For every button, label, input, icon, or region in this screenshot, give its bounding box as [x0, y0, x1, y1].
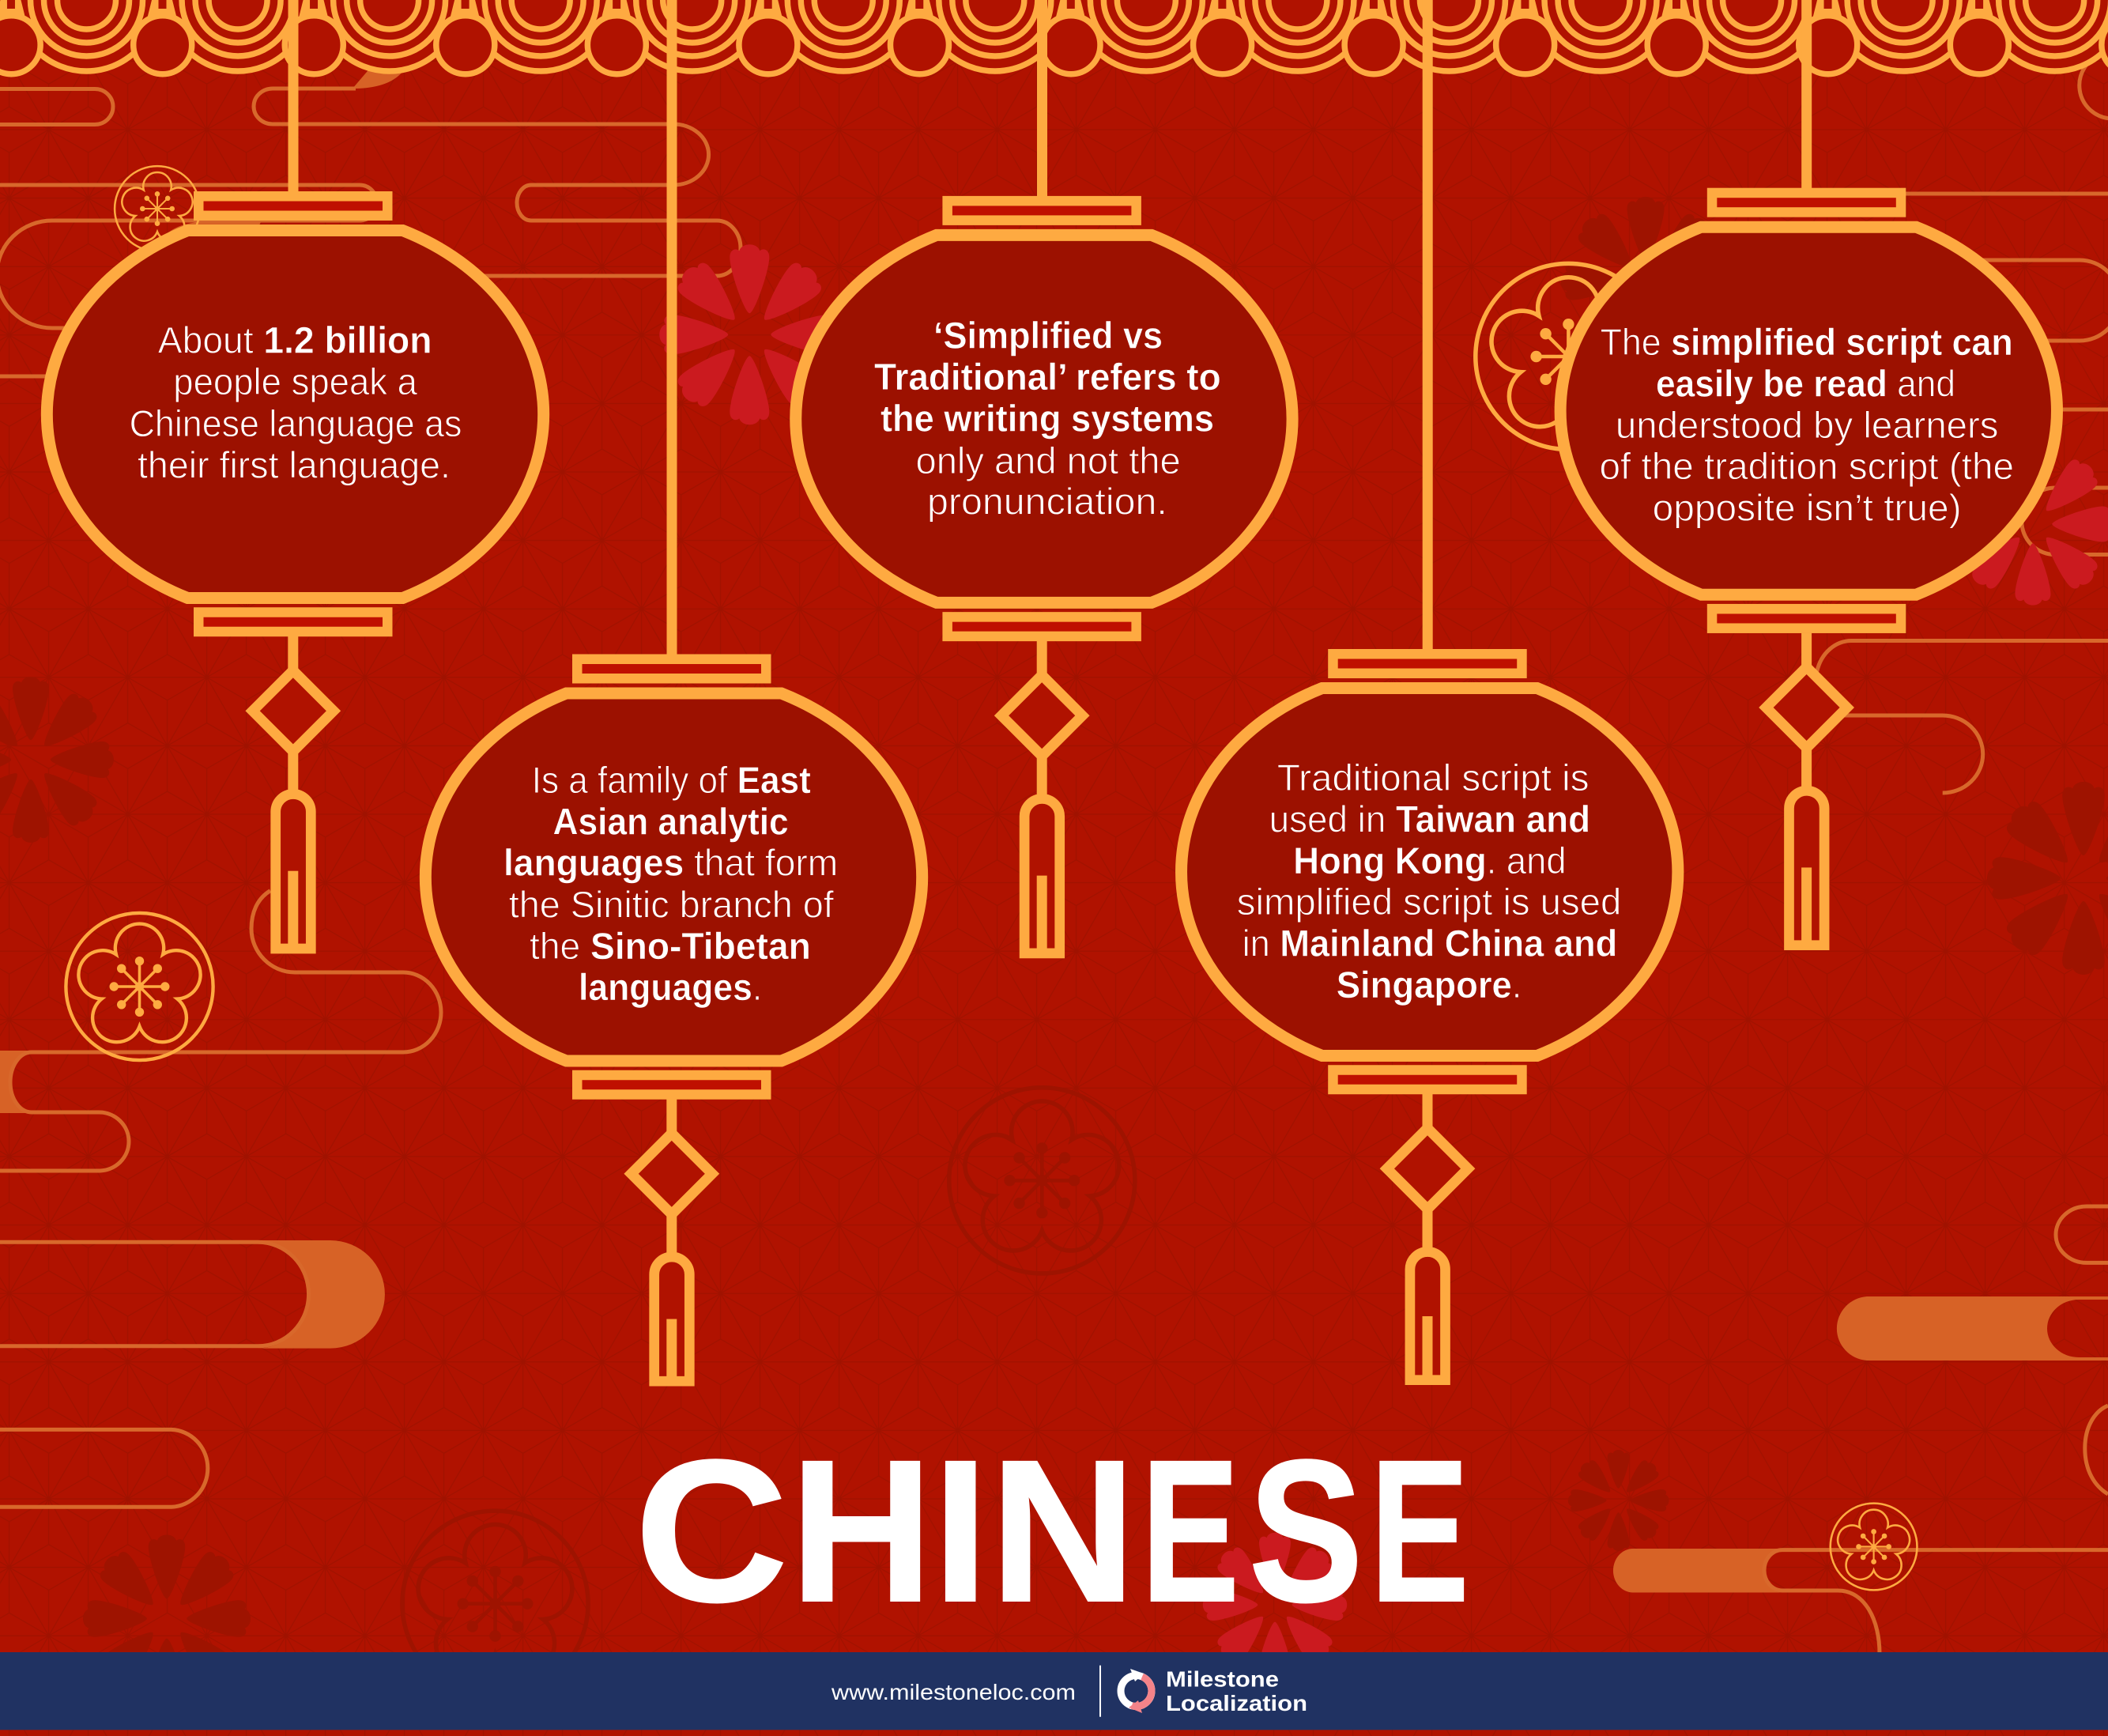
footer brand name: Milestone	[1166, 1666, 1279, 1691]
text: lantern 4: in Mainland China and	[1243, 923, 1617, 964]
text: lantern 2: Is a family of East	[532, 759, 811, 801]
text: lantern 2: languages.	[579, 966, 762, 1008]
footer divider	[1099, 1666, 1101, 1717]
icon: red blossom right	[1952, 443, 2108, 606]
icon: dark blossom lower left	[83, 1534, 251, 1703]
icon: plum outline lower right	[1831, 1504, 1917, 1590]
text: lantern 2: languages that form	[503, 841, 838, 884]
text: lantern 4	[1237, 757, 1621, 1006]
icon: plum outline left	[66, 913, 213, 1060]
title: H	[790, 1418, 933, 1644]
text: lantern 5: easily be read and	[1656, 362, 1955, 404]
text: lantern 3	[874, 315, 1221, 523]
text: lantern 5: opposite isn’t true)	[1653, 487, 1962, 529]
text: lantern 4: Hong Kong. and	[1293, 840, 1567, 881]
cloud lines: lower left	[0, 891, 441, 1507]
text: lantern 1: About 1.2 billion	[158, 319, 432, 360]
title: I	[933, 1418, 988, 1644]
text: lantern 1: Chinese language as	[130, 402, 462, 444]
footer url: www.milestoneloc.com	[831, 1680, 1076, 1704]
text: lantern 3: ‘Simplified vs	[933, 315, 1163, 357]
icon: dark blossom lower right	[1568, 1450, 1669, 1551]
title: E	[1371, 1418, 1469, 1644]
panel: lantern 1	[47, 0, 544, 950]
text: lantern 1	[130, 319, 462, 485]
icon: plum outline dark lower left	[402, 1511, 588, 1696]
text: lantern 2: the Sinitic branch of	[509, 884, 835, 926]
title: C	[635, 1418, 788, 1644]
panel: lantern 5	[1560, 0, 2057, 946]
icon: dark blossom right	[1987, 782, 2108, 975]
text: lantern 5: understood by learners	[1616, 404, 1998, 446]
text: lantern 1: people speak a	[173, 360, 418, 402]
cloud lines: right side	[1613, 54, 2108, 1654]
text: lantern 1: their first language.	[138, 444, 451, 485]
icon: plum outline behind lantern five	[1476, 263, 1661, 450]
text: lantern 4: used in Taiwan and	[1269, 798, 1590, 840]
text: lantern 5: The simplified script can	[1601, 321, 2013, 363]
text: lantern 5: of the tradition script (the	[1600, 445, 2014, 487]
tassel: lantern 4	[1410, 1252, 1445, 1381]
text: lantern 2	[503, 759, 838, 1008]
footer brand name: Localization	[1166, 1691, 1307, 1715]
panel: lantern 4	[1182, 0, 1678, 1381]
text: lantern 3: only and not the	[915, 440, 1181, 481]
top scalloped border	[0, 0, 2108, 74]
icon: plum outline top left	[115, 166, 200, 251]
panel: lantern 2	[425, 0, 922, 1382]
title: E	[1141, 1418, 1239, 1644]
icon: milestone logo	[1121, 1669, 1152, 1713]
icon: plum outline dark centre	[949, 1088, 1135, 1274]
text: lantern 4: simplified script is used	[1237, 881, 1621, 923]
text: lantern 3: the writing systems	[881, 397, 1214, 439]
icon: dark blossom left	[0, 677, 114, 843]
text: lantern 5	[1600, 321, 2014, 529]
title: N	[990, 1418, 1136, 1644]
text: lantern 4: Traditional script is	[1277, 757, 1589, 798]
text: lantern 3: pronunciation.	[927, 481, 1167, 523]
footer brand name	[1166, 1666, 1307, 1715]
text: lantern 2: the Sino-Tibetan	[530, 925, 811, 967]
icon: dark blossom behind lantern five	[1561, 197, 1730, 366]
panel: lantern 3	[796, 0, 1292, 955]
icon: red blossom behind title	[1203, 1533, 1347, 1677]
icon: red blossom centre	[659, 244, 839, 425]
footer band	[0, 1652, 2108, 1730]
text: lantern 4: Singapore.	[1337, 964, 1522, 1006]
tassel: lantern 2	[654, 1257, 689, 1382]
text: lantern 3: Traditional’ refers to	[874, 356, 1221, 398]
cloud lines: upper left	[0, 66, 741, 376]
title: S	[1249, 1418, 1363, 1644]
text: lantern 2: Asian analytic	[553, 801, 789, 843]
